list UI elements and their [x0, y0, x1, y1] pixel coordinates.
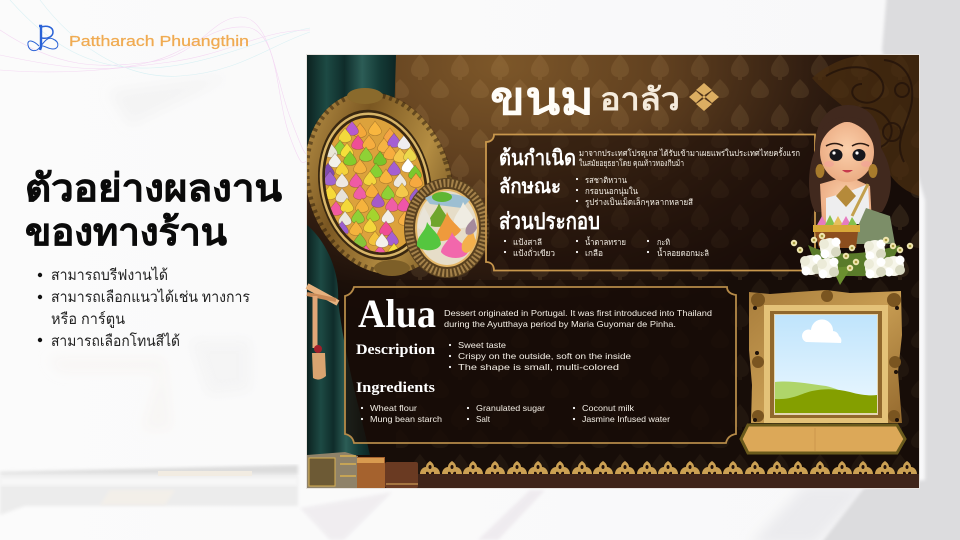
characteristics: รูปร่างเป็นเม็ดเล็กๆหลากหลายสี [585, 197, 693, 208]
bullet list: หรือ การ์ตูน [51, 311, 125, 328]
ingredients thai: น้ำลอยดอกมะลิ [657, 247, 709, 258]
description: Crispy on the outside, soft on the inside [458, 352, 632, 361]
heading: ของทางร้าน [25, 212, 227, 254]
panel: english text [345, 287, 736, 443]
panel: thai text [486, 134, 815, 270]
thai ornament top right [812, 55, 919, 196]
offering tray [813, 215, 860, 248]
intro [444, 309, 712, 329]
ingredients: Coconut milk [582, 404, 635, 413]
ingredients: Jasmine Infused water [582, 415, 670, 424]
ingredients: Ingredients [356, 380, 435, 396]
ingredients thai: ส่วนประกอบ [499, 209, 600, 234]
panel: alua poster [282, 54, 920, 489]
description [356, 341, 632, 372]
title: ขนม [490, 73, 594, 124]
characteristics: กรอบนอกนุ่มใน [585, 186, 638, 196]
origin: ต้นกำเนิด [499, 146, 576, 170]
name plaque [741, 425, 905, 453]
bottom band [396, 474, 919, 488]
logo mark [28, 26, 58, 51]
heading [25, 168, 282, 254]
bullet list: สามารถเลือกแนวได้เช่น ทางการ [51, 288, 250, 306]
intro: Dessert originated in Portugal. It was first introduced into Thailand [444, 309, 712, 318]
heading: ตัวอย่างผลงาน [25, 168, 282, 210]
bullet list: สามารถบรีฟงานได้ [51, 266, 168, 284]
dessert candies [322, 121, 422, 260]
small oval frame [404, 178, 490, 278]
bullet list [38, 266, 250, 350]
logo name: Pattharach Phuangthin [69, 34, 249, 50]
large oval frame [307, 88, 452, 276]
panel: english text: Alua [358, 291, 436, 336]
ingredients thai: แป้งถั่วเขียว [513, 247, 555, 258]
picture frame [749, 290, 902, 423]
ingredients: Wheat flour [370, 404, 417, 413]
ingredients thai: น้ำตาลทราย [585, 236, 626, 247]
ingredients thai: กะทิ [657, 238, 670, 247]
ingredients [356, 380, 670, 424]
origin: ในสมัยอยุธยาโดย คุณท้าวทองกีบม้า [579, 158, 684, 168]
characteristics [499, 176, 693, 208]
description: Description [356, 342, 435, 358]
description: The shape is small, multi-colored [458, 363, 620, 372]
logo [28, 26, 249, 51]
curtain [307, 55, 396, 455]
gold ornament border [419, 461, 918, 476]
origin: มาจากประเทศโปรตุเกส ได้รับเข้ามาเผยแพร่ในประเทศไทยครั้งแรก [579, 147, 800, 158]
ingredients thai [499, 209, 709, 258]
ingredients: Granulated sugar [476, 404, 545, 413]
description: Sweet taste [458, 341, 507, 350]
icon: thai flower ornament [689, 83, 719, 111]
title: อาลัว [600, 82, 680, 117]
character [791, 105, 913, 285]
ingredients: Salt [476, 415, 491, 424]
ingredients: Mung bean starch [370, 415, 442, 424]
rope tie and tassel [307, 286, 338, 380]
title [490, 73, 680, 124]
decorative waves [0, 0, 310, 163]
intro: during the Ayutthaya period by Maria Guyomar de Pinha. [444, 320, 676, 329]
jasmine garland [791, 233, 913, 285]
ingredients thai: เกลือ [585, 249, 603, 258]
books [307, 452, 418, 488]
origin [499, 146, 800, 170]
ingredients thai: แป้งสาลี [513, 238, 542, 247]
bullet list: สามารถเลือกโทนสีได้ [51, 332, 180, 350]
characteristics: ลักษณะ [499, 176, 561, 198]
characteristics: รสชาติหวาน [585, 176, 627, 185]
